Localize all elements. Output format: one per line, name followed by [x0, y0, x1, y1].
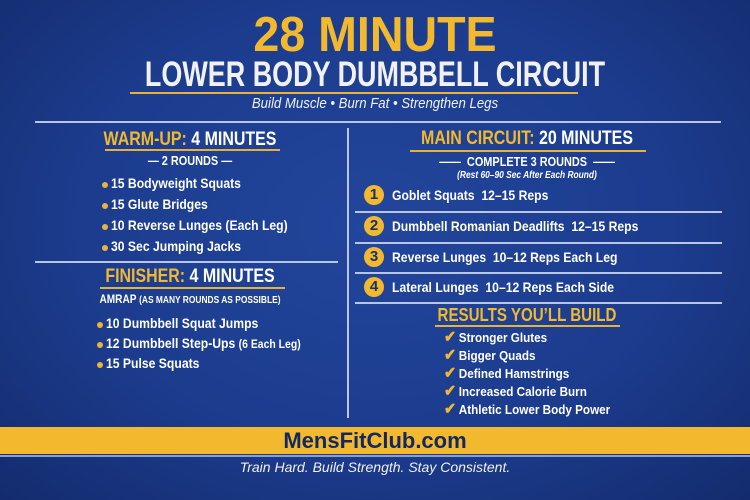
- warm-up list: [102, 175, 288, 254]
- footer banner: [0, 427, 750, 454]
- main circuit heading: MAIN CIRCUIT: 20 MINUTES: [421, 128, 633, 149]
- panel: main circuit: [355, 128, 722, 304]
- exercise 3: Reverse Lunges 10–12 Reps Each Leg: [392, 249, 617, 265]
- results heading: RESULTS YOU’LL BUILD: [438, 305, 616, 325]
- warm-up list: 10 Reverse Lunges (Each Leg): [111, 217, 288, 233]
- warm-up list: 15 Glute Bridges: [111, 196, 208, 212]
- exercise 1: 1: [370, 186, 378, 203]
- exercise 2: Dumbbell Romanian Deadlifts 12–15 Reps: [392, 218, 638, 234]
- finisher list: [97, 315, 301, 371]
- results checklist: ✔Athletic Lower Body Power: [444, 401, 610, 418]
- exercise 4: Lateral Lunges 10–12 Reps Each Side: [392, 279, 614, 295]
- footer tagline: Train Hard. Build Strength. Stay Consistent.: [240, 459, 510, 475]
- rounds label: —— COMPLETE 3 ROUNDS ——: [439, 154, 615, 169]
- exercise 3: 3: [370, 248, 378, 265]
- panel: finisher: [97, 266, 301, 371]
- subtitle heading: LOWER BODY DUMBBELL CIRCUIT: [145, 55, 605, 94]
- results checklist: [444, 329, 610, 418]
- panel: results: [435, 305, 620, 418]
- exercise 1: [364, 185, 548, 205]
- exercise 4: 4: [370, 278, 378, 295]
- finisher list: 15 Pulse Squats: [106, 355, 199, 371]
- results checklist: ✔Increased Calorie Burn: [444, 383, 587, 400]
- warm-up list: 30 Sec Jumping Jacks: [111, 238, 241, 254]
- panel: warm-up: [102, 129, 288, 254]
- tagline: Build Muscle • Burn Fat • Strengthen Legs: [252, 95, 498, 112]
- exercise 2: 2: [370, 217, 378, 234]
- results checklist: ✔Defined Hamstrings: [444, 365, 569, 382]
- warm-up heading: WARM-UP: 4 MINUTES: [104, 129, 276, 150]
- exercise 1: Goblet Squats 12–15 Reps: [392, 187, 548, 203]
- finisher list: 10 Dumbbell Squat Jumps: [106, 315, 258, 331]
- amrap label: AMRAP (AS MANY ROUNDS AS POSSIBLE): [99, 292, 280, 306]
- results checklist: ✔Stronger Glutes: [444, 329, 547, 346]
- results checklist: ✔Bigger Quads: [444, 347, 535, 364]
- finisher list: 12 Dumbbell Step-Ups (6 Each Leg): [106, 335, 301, 351]
- warm-up list: 15 Bodyweight Squats: [111, 175, 241, 191]
- title: 28 MINUTE: [253, 8, 497, 62]
- finisher heading: FINISHER: 4 MINUTES: [105, 266, 275, 287]
- website: MensFitClub.com: [283, 428, 467, 453]
- rounds label: — 2 ROUNDS —: [148, 153, 232, 168]
- rest note: (Rest 60–90 Sec After Each Round): [457, 170, 597, 181]
